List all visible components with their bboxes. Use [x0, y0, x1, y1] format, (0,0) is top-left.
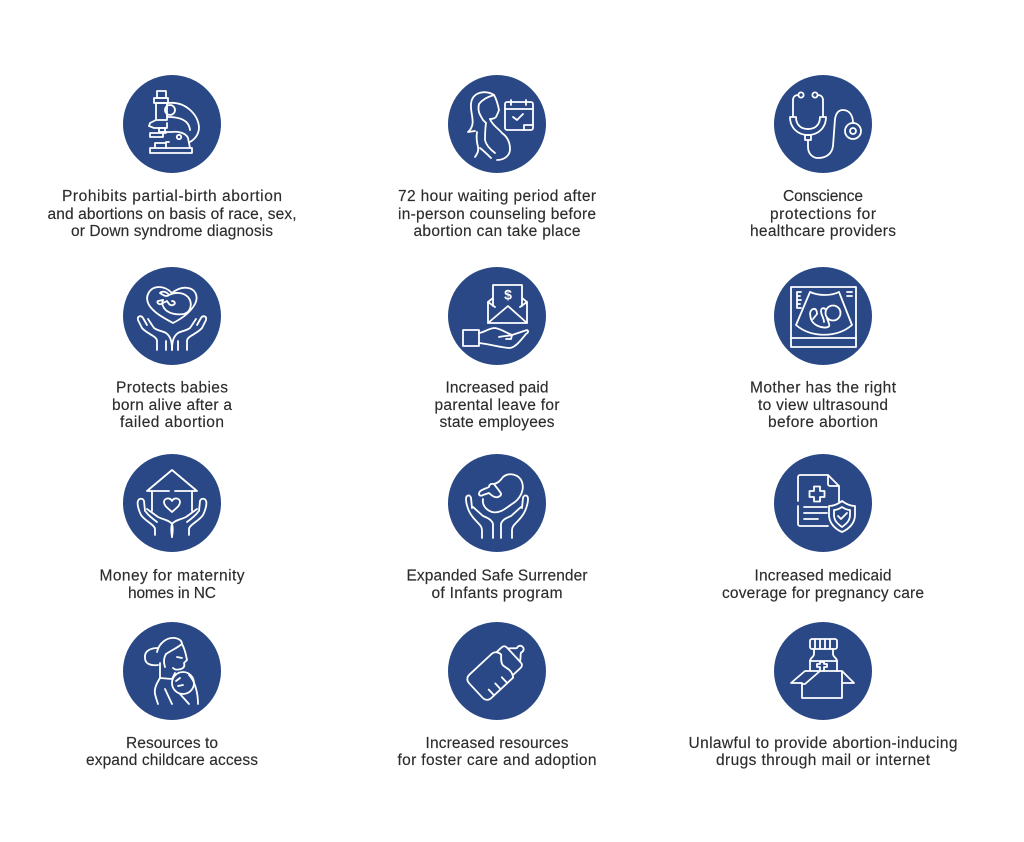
- panel: paid parental leave: [434, 267, 560, 431]
- text: conscience protections: protections for: [770, 206, 876, 223]
- text: childcare access: expand childcare access: [86, 752, 258, 769]
- panel: abortion drugs by mail: [688, 622, 958, 769]
- icon: ultrasound screen: [774, 267, 872, 365]
- icon: envelope with dollar over hand: [448, 267, 546, 365]
- text: childcare access: [86, 735, 258, 769]
- text: partial-birth prohibition: and abortions on basis of race, sex,: [48, 206, 296, 223]
- text: abortion drugs by mail: Unlawful to provide abortion-inducing: [688, 735, 958, 752]
- icon: mother holding baby: [123, 622, 221, 720]
- text: paid parental leave: Increased paid: [446, 380, 548, 396]
- text: maternity homes: homes in NC: [128, 585, 216, 602]
- text: babies born alive: born alive after a: [112, 397, 232, 414]
- text: babies born alive: failed abortion: [120, 414, 224, 431]
- text: paid parental leave: [434, 380, 560, 431]
- panel: safe surrender: [406, 454, 588, 602]
- icon: pregnant woman and calendar: [448, 75, 546, 173]
- text: conscience protections: Conscience: [783, 188, 863, 205]
- text: foster care and adoption: Increased resources: [426, 735, 569, 752]
- panel: foster care and adoption: [398, 622, 596, 769]
- text: paid parental leave: parental leave for: [434, 397, 560, 414]
- panel: partial-birth prohibition: [48, 75, 296, 240]
- text: safe surrender: of Infants program: [432, 585, 562, 602]
- text: waiting period: [398, 188, 596, 240]
- panel: childcare access: [86, 622, 258, 769]
- icon: microscope: [123, 75, 221, 173]
- text: waiting period: abortion can take place: [414, 223, 580, 240]
- text: safe surrender: Expanded Safe Surrender: [406, 568, 588, 584]
- text: babies born alive: Protects babies: [116, 380, 228, 396]
- panel: medicaid coverage: [722, 454, 924, 602]
- icon: envelope with dollar over hand: $: [504, 286, 512, 302]
- panel: waiting period: [398, 75, 596, 240]
- text: abortion drugs by mail: drugs through mail or internet: [716, 752, 931, 769]
- icon: baby bottle: [448, 622, 546, 720]
- icon: house with heart in hands: [123, 454, 221, 552]
- text: partial-birth prohibition: or Down syndrome diagnosis: [71, 223, 273, 240]
- text: conscience protections: [750, 188, 896, 240]
- icon: medicine bottle in box: [774, 622, 872, 720]
- text: waiting period: in-person counseling before: [398, 206, 596, 223]
- text: maternity homes: [100, 568, 245, 602]
- icon: medical document with shield: [774, 454, 872, 552]
- text: medicaid coverage: [722, 568, 924, 602]
- text: view ultrasound: to view ultrasound: [758, 397, 888, 414]
- icon: infant in hands: [448, 454, 546, 552]
- text: foster care and adoption: for foster care and adoption: [398, 752, 596, 769]
- text: conscience protections: healthcare providers: [750, 223, 896, 240]
- text: view ultrasound: [750, 380, 897, 431]
- text: paid parental leave: state employees: [440, 414, 555, 431]
- panel: view ultrasound: [750, 267, 897, 431]
- panel: conscience protections: [750, 75, 896, 240]
- text: waiting period: 72 hour waiting period after: [398, 188, 596, 205]
- text: partial-birth prohibition: [48, 188, 296, 240]
- text: babies born alive: [112, 380, 232, 431]
- text: view ultrasound: Mother has the right: [750, 380, 897, 396]
- text: safe surrender: [406, 568, 588, 602]
- text: medicaid coverage: Increased medicaid: [754, 568, 892, 584]
- text: maternity homes: Money for maternity: [100, 568, 245, 584]
- text: foster care and adoption: [398, 735, 596, 769]
- text: childcare access: Resources to: [126, 735, 218, 752]
- panel: maternity homes: [100, 454, 245, 602]
- text: partial-birth prohibition: Prohibits partial-birth abortion: [62, 188, 282, 205]
- text: medicaid coverage: coverage for pregnancy care: [722, 585, 924, 602]
- icon: stethoscope: [774, 75, 872, 173]
- text: abortion drugs by mail: [688, 735, 958, 769]
- icon: heart with fetus and hands: [123, 267, 221, 365]
- text: view ultrasound: before abortion: [768, 414, 878, 431]
- panel: babies born alive: [112, 267, 232, 431]
